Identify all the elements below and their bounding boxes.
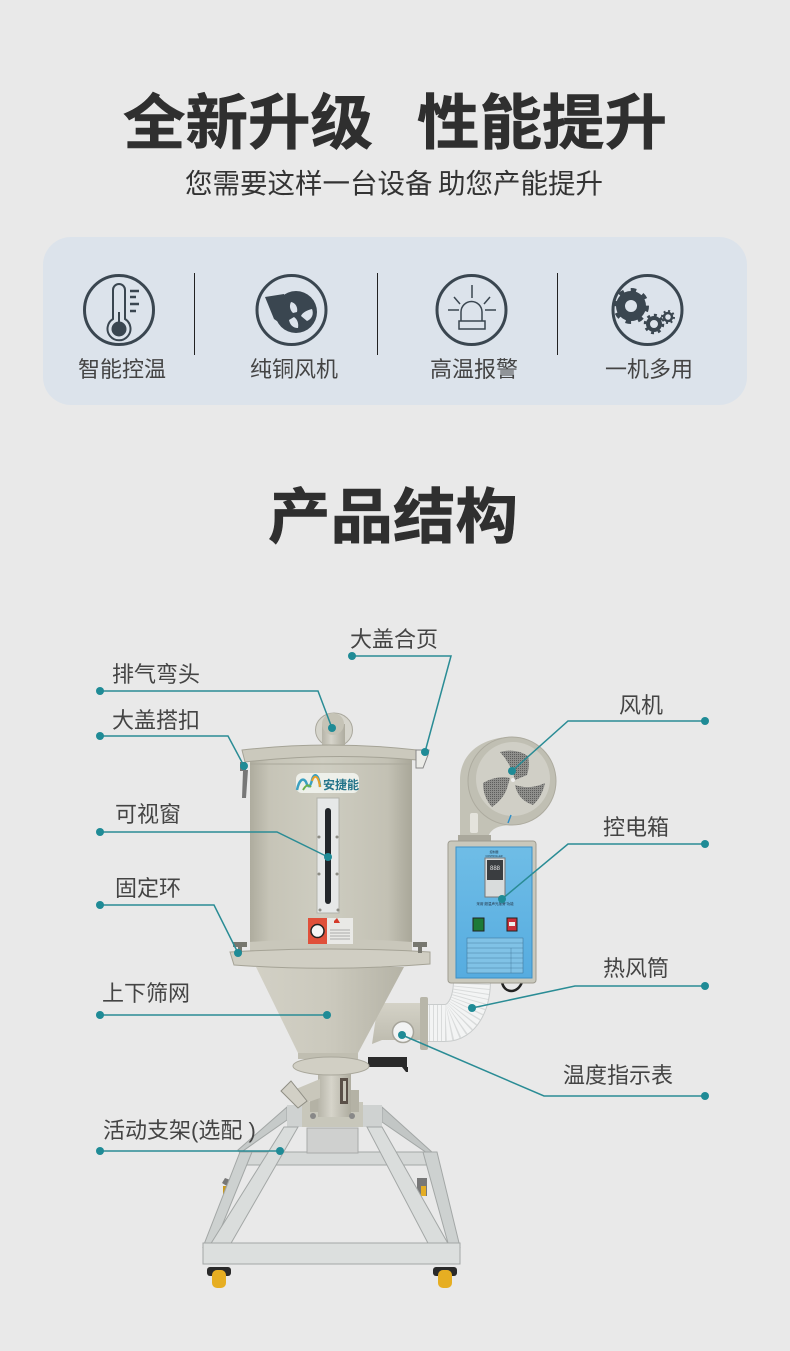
product: dryer machine (203, 713, 556, 1288)
callout: 固定环: 固定环 (115, 876, 181, 901)
hot air hose (425, 980, 472, 1023)
outlet pipe (372, 997, 428, 1050)
icon: gears (613, 276, 682, 344)
control box: CONTROLLER (485, 855, 503, 858)
callout: 活动支架: 活动支架(选配 ) (103, 1118, 256, 1143)
callout: 可视窗: 可视窗 (115, 802, 181, 827)
callout: 固定环 (96, 876, 242, 957)
callout: 控电箱 (498, 815, 709, 903)
callout: 风机: 风机 (619, 693, 663, 718)
heading: 产品结构: 产品结构 (268, 484, 518, 551)
title (123, 90, 667, 157)
callout: 大盖搭扣 (96, 708, 248, 770)
subtitle (185, 168, 603, 199)
callout: 排气弯头 (96, 662, 336, 732)
callout: 大盖搭扣: 大盖搭扣 (112, 708, 200, 733)
lower column and side pipe (281, 1072, 363, 1127)
black plate (368, 1057, 408, 1072)
control box: 采用“超温声光报警”功能 (476, 901, 514, 906)
callout: 热风筒: 热风筒 (603, 956, 669, 981)
callout: 上下筛网: 上下筛网 (102, 981, 190, 1006)
callout: 热风筒 (468, 956, 709, 1012)
casters (207, 1267, 457, 1288)
exhaust elbow (316, 713, 352, 747)
callout: 上下筛网 (96, 981, 331, 1019)
icon: thermometer (84, 276, 154, 344)
callout: 可视窗 (96, 802, 332, 861)
callout: 大盖合页 (348, 627, 451, 756)
callout: 温度指示表: 温度指示表 (563, 1063, 673, 1088)
callout: 活动支架 (96, 1118, 284, 1155)
cone bottom flange (293, 1053, 369, 1075)
lid latches and clamps (233, 750, 429, 953)
icon: alarm (437, 276, 506, 344)
steel box (307, 1128, 358, 1153)
label: 高温报警: 高温报警 (430, 357, 518, 382)
warning label (308, 918, 353, 944)
sight window (317, 798, 340, 913)
subtitle: 助您产能提升 (438, 168, 603, 199)
blower fan (458, 737, 556, 841)
callout: 风机 (508, 693, 709, 775)
label: 纯铜风机: 纯铜风机 (250, 357, 338, 382)
title: 性能提升 (417, 90, 667, 157)
callout: 排气弯头: 排气弯头 (112, 662, 200, 687)
icon: copper fan (257, 276, 326, 344)
logo: 安捷能 (323, 777, 359, 792)
title: 全新升级 (123, 90, 373, 157)
subtitle: 您需要这样一台设备 (185, 168, 432, 199)
hopper body (230, 745, 430, 968)
callout: 温度指示表 (398, 1031, 709, 1100)
callout: 大盖合页: 大盖合页 (350, 627, 438, 652)
panel: features (43, 237, 747, 405)
temperature gauge (392, 1022, 414, 1042)
control box (448, 841, 536, 991)
logo (296, 773, 359, 793)
label: 智能控温: 智能控温 (78, 357, 166, 382)
control box: 888 (490, 866, 501, 872)
control box: 控制器 (489, 849, 499, 854)
label: 一机多用: 一机多用 (605, 357, 693, 382)
cone (256, 967, 404, 1053)
callout: 控电箱: 控电箱 (603, 815, 669, 840)
frame stand (203, 1105, 460, 1264)
